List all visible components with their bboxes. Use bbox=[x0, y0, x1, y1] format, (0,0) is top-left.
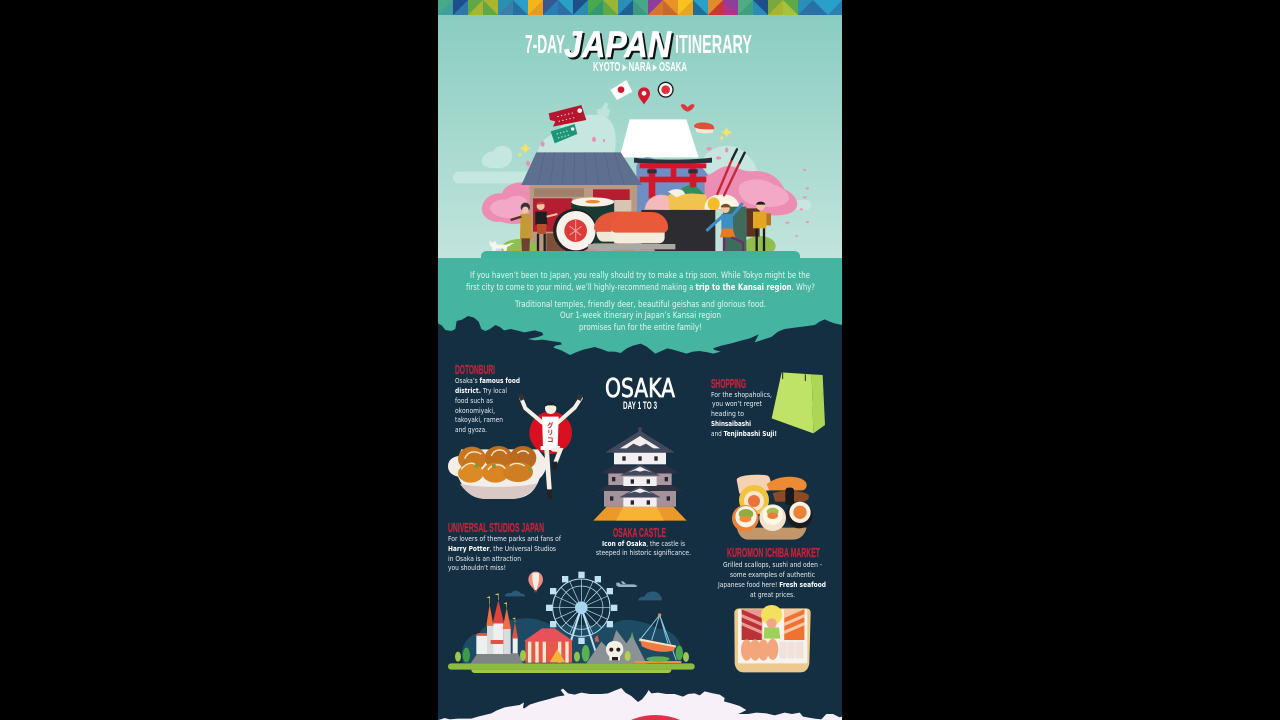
text block: Kuromon Ichiba Market: some examples of authentic bbox=[730, 571, 815, 579]
text block: Universal Studios Japan bbox=[448, 521, 562, 572]
illustration: Osaka castle bbox=[593, 427, 687, 521]
title: JAPAN bbox=[564, 24, 672, 65]
heading: Osaka day range: OSAKA bbox=[605, 374, 675, 404]
text block: Kuromon Ichiba Market: Japanese food here! Fresh seafood bbox=[717, 581, 826, 589]
text block: Dotonburi: and gyoza. bbox=[455, 426, 487, 434]
hero illustration top icons bbox=[597, 80, 695, 118]
text block: Shopping: For the shopaholics, bbox=[711, 391, 772, 399]
background clouds bbox=[453, 115, 811, 210]
text block: Shopping: and Tenjinbashi Suji! bbox=[711, 430, 777, 438]
text block: Dotonburi: okonomiyaki, bbox=[455, 407, 495, 415]
mount fuji bbox=[620, 119, 699, 157]
illustration: sushi platter bbox=[732, 475, 813, 540]
ramen bowl bbox=[641, 185, 740, 253]
illustration: takoyaki dish bbox=[448, 446, 547, 499]
text block: Shopping: Shinsaibashi bbox=[711, 420, 751, 428]
illustration: Glico running man: グ bbox=[547, 420, 554, 429]
person: woman in kimono bbox=[511, 203, 532, 253]
text block: Shopping bbox=[711, 377, 777, 438]
icon: map pin bbox=[638, 87, 650, 105]
text block: Dotonburi: DOTONBURI bbox=[455, 363, 495, 377]
text block: intro bbox=[466, 271, 815, 333]
panel: sky background bbox=[438, 15, 842, 259]
nigiri sushi bbox=[594, 212, 668, 243]
text block: Dotonburi: takoyaki, ramen bbox=[455, 416, 503, 424]
illustration: sashimi box bbox=[734, 605, 811, 672]
heading: Osaka day range bbox=[605, 374, 675, 412]
text block: Osaka Castle: Icon of Osaka, the castle is bbox=[602, 540, 685, 548]
text block: Shopping: you won’t regret bbox=[712, 400, 762, 408]
title bbox=[526, 31, 752, 60]
text block: Shopping: heading to bbox=[711, 410, 744, 418]
person: girl in blue bbox=[707, 204, 743, 252]
text block: Kuromon Ichiba Market bbox=[717, 546, 826, 599]
next section: red sun bbox=[631, 715, 680, 720]
illustration: theme park bbox=[448, 572, 695, 673]
text block: intro: If you haven’t been to Japan, you really should try to make a trip soon. While Tokyo might be the bbox=[470, 271, 810, 281]
flag: green koi streamer bbox=[551, 124, 577, 143]
person: man with apron bbox=[535, 202, 557, 252]
text block: Universal Studios Japan: you shouldn’t miss! bbox=[448, 564, 506, 572]
subtitle: route: KYOTO ▸ NARA ▸ OSAKA bbox=[593, 60, 687, 74]
illustration: Glico running man: リ bbox=[547, 428, 553, 437]
panel: intro teal band bbox=[438, 258, 842, 358]
torii gate bbox=[634, 158, 712, 198]
title: 7-DAY bbox=[525, 29, 565, 59]
cat bbox=[489, 240, 514, 251]
illustration: Glico running man: コ bbox=[547, 435, 553, 444]
text block: intro: first city to come to your mind, we’ll highly-recommend making a trip to the Kansai region. Why? bbox=[466, 283, 815, 293]
text block: Kuromon Ichiba Market: Grilled scallops, sushi and oden - bbox=[723, 561, 822, 569]
text block: Kuromon Ichiba Market: at great prices. bbox=[750, 591, 795, 599]
tree silhouette divider bbox=[438, 316, 842, 365]
text block: Universal Studios Japan: For lovers of theme parks and fans of bbox=[448, 535, 562, 543]
icon: sushi roll bbox=[658, 82, 674, 98]
dark hills bbox=[462, 618, 682, 663]
sushi roll back bbox=[571, 197, 614, 243]
text block: Dotonburi bbox=[455, 363, 520, 434]
illustration: Glico running man bbox=[518, 394, 583, 499]
sparkles bbox=[517, 127, 732, 157]
swing ride bbox=[635, 613, 681, 663]
bushes bbox=[501, 236, 776, 251]
castle bbox=[471, 593, 523, 663]
person: man with yellow backpack bbox=[746, 202, 771, 252]
chopsticks bbox=[717, 149, 745, 195]
balloon bbox=[528, 572, 543, 592]
house bbox=[521, 152, 642, 253]
text block: Dotonburi: Osaka’s famous food bbox=[455, 377, 520, 385]
clouds bbox=[505, 591, 662, 600]
trees bbox=[455, 645, 689, 662]
ground bbox=[448, 663, 695, 673]
sushi floating bbox=[694, 122, 714, 133]
hero illustration: Japan collage bbox=[453, 105, 811, 258]
left cherry tree bbox=[482, 182, 534, 224]
blue hills bbox=[636, 157, 708, 253]
text block: Universal Studios Japan: in Osaka is an attraction bbox=[448, 555, 521, 563]
text block: intro: promises fun for the entire family! bbox=[579, 323, 702, 333]
ground strip bbox=[481, 251, 800, 258]
icon: shopping bag bbox=[772, 372, 825, 433]
green screen bbox=[723, 207, 746, 253]
text block: Shopping: SHOPPING bbox=[711, 377, 746, 391]
plane bbox=[616, 581, 638, 587]
text block: intro: Our 1-week itinerary in Japan’s Kansai region bbox=[560, 311, 721, 321]
icon: heart bbox=[681, 104, 695, 112]
petals bbox=[526, 137, 809, 237]
next section: white cloud edge bbox=[438, 688, 842, 720]
ferris wheel bbox=[546, 572, 617, 661]
sushi roll front bbox=[553, 209, 597, 253]
text block: Universal Studios Japan: Harry Potter, the Universal Studios bbox=[448, 545, 556, 553]
flag: red koi streamer bbox=[549, 105, 586, 127]
text block: Osaka Castle bbox=[596, 526, 691, 557]
circus tent bbox=[524, 628, 573, 663]
text block: Osaka Castle: steeped in historic significance. bbox=[596, 549, 691, 557]
icon: thumbs up bbox=[597, 102, 610, 118]
table bbox=[588, 244, 676, 251]
icon: japan flag bbox=[610, 80, 632, 100]
heading: Osaka day range: DAY 1 TO 3 bbox=[623, 400, 657, 412]
text block: Osaka Castle: OSAKA CASTLE bbox=[613, 526, 666, 540]
text block: Dotonburi: food such as bbox=[455, 397, 493, 405]
right cherry tree bbox=[705, 166, 797, 215]
text block: intro: Traditional temples, friendly deer, beautiful geishas and glorious food. bbox=[514, 300, 766, 310]
text block: Kuromon Ichiba Market: KUROMON ICHIBA MARKET bbox=[727, 546, 820, 560]
panel: dark Osaka section background bbox=[438, 365, 842, 720]
text block: Dotonburi: district. Try local bbox=[455, 387, 507, 395]
decorative triangle banner bbox=[438, 0, 842, 15]
text block: Universal Studios Japan: UNIVERSAL STUDIOS JAPAN bbox=[448, 521, 544, 535]
skull mountain bbox=[586, 630, 646, 663]
title: ITINERARY bbox=[675, 29, 752, 59]
